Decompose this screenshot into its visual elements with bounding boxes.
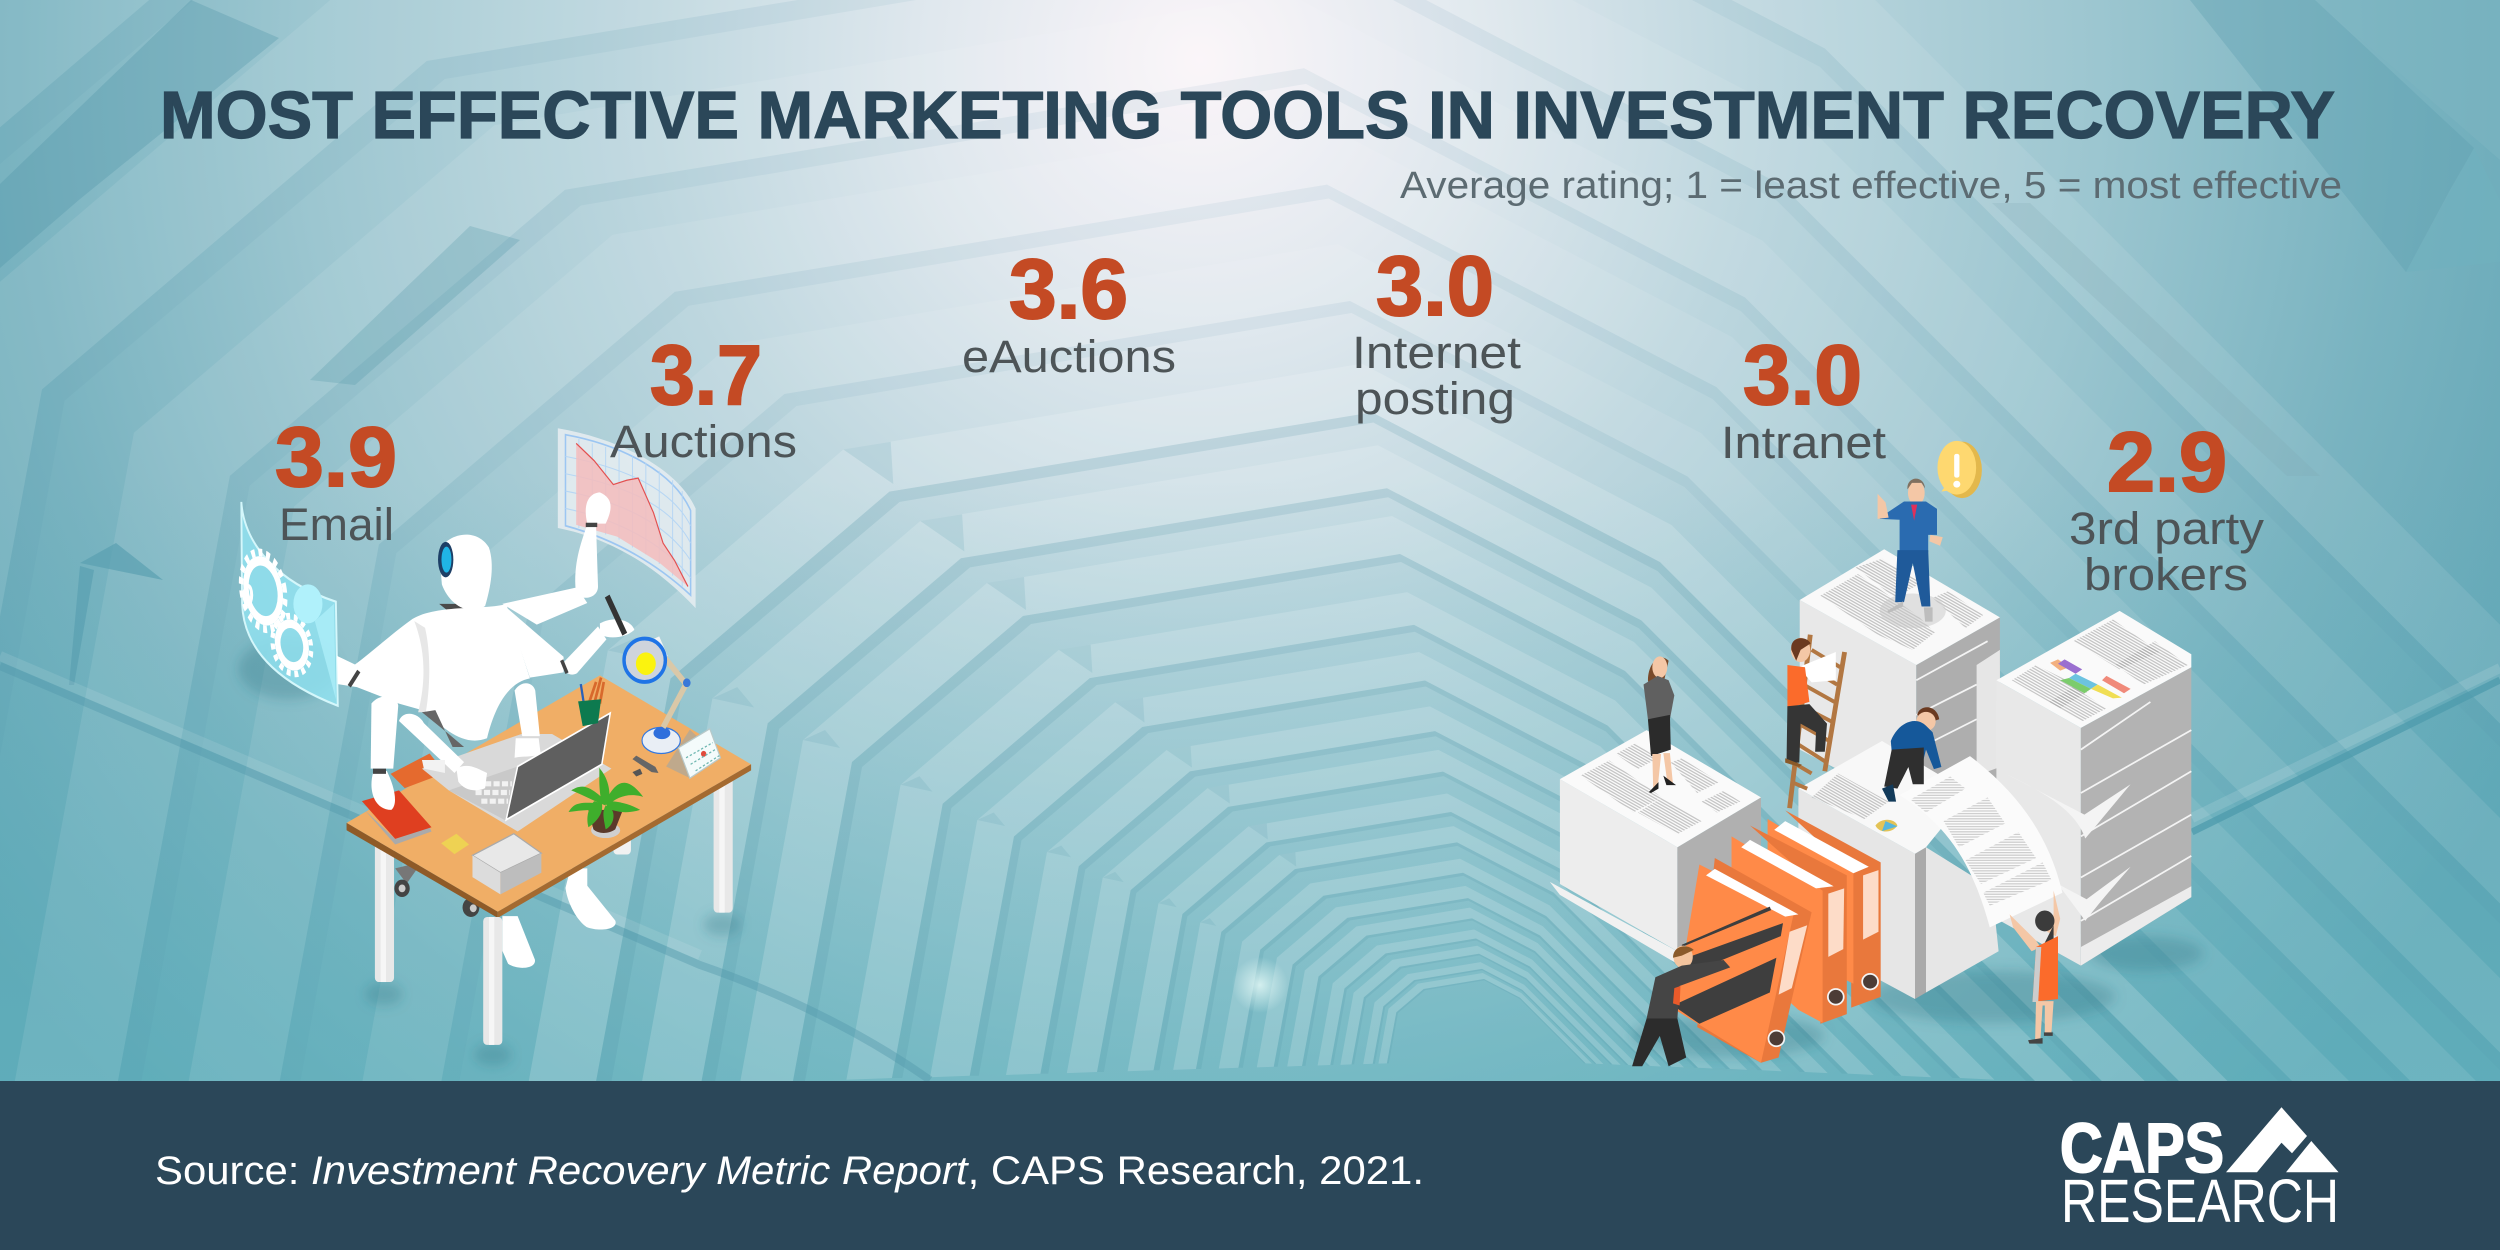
person: woman holding paper (2010, 891, 2060, 1044)
icon: pencil cup (578, 678, 604, 726)
icon: alert speech bubble (1937, 441, 1982, 498)
score: auctions (610, 328, 797, 467)
robot upper right arm and hand (502, 492, 611, 625)
person: man bending over paper (1882, 707, 1941, 802)
score: eAuctions (962, 242, 1176, 382)
hologram panel: gears (235, 502, 338, 706)
robot inner right arm and hand (515, 683, 541, 758)
robot pen hand (506, 596, 634, 678)
desk (347, 675, 751, 1045)
icon: paper box (472, 834, 541, 894)
curved sheet (1900, 756, 2062, 927)
subtitle: rating scale: Average rating; 1 = least effective, 5 = most effective (1400, 165, 2342, 207)
robot (337, 492, 634, 810)
hologram panel: falling chart (558, 428, 696, 608)
binder: front tilted (1673, 858, 1812, 1063)
robot left arm (337, 619, 432, 712)
robot lower left arm and hand (371, 696, 398, 810)
icon: desk calendar (666, 729, 720, 778)
score: email: Email (279, 499, 394, 550)
illustration: paper stacks, binders and workers (1550, 441, 2203, 1066)
score: email (275, 410, 397, 550)
score: internet posting (1352, 239, 1522, 424)
paper stack: left with woman (1550, 730, 1761, 966)
paper corner fold (2005, 773, 2131, 839)
robot inner left arm and hand (399, 710, 487, 790)
ladder (1790, 635, 1845, 808)
binder: middle (1732, 826, 1847, 1024)
laptop (422, 713, 611, 832)
score: 3rd party brokers: 3rd party (2069, 503, 2265, 554)
logo: CAPS Research (2060, 1107, 2339, 1235)
score: 3rd party brokers: brokers (2084, 549, 2248, 600)
colored table on paper (2050, 659, 2131, 698)
icon: sticky note (441, 834, 469, 854)
paper stack: top center (1800, 549, 2000, 810)
logo: CAPS Research: CAPS (2060, 1109, 2224, 1187)
score: auctions: Auctions (610, 416, 797, 467)
score: eAuctions: eAuctions (962, 331, 1176, 382)
robot torso (412, 604, 530, 741)
icon: lamp (624, 636, 691, 753)
score: internet posting: Internet (1352, 327, 1522, 378)
icon: marker and clips (632, 756, 658, 776)
robot head and neck (438, 535, 492, 615)
score: intranet: 3.0 (1743, 328, 1862, 422)
score: intranet: Intranet (1721, 417, 1887, 468)
score: 3rd party brokers (2069, 415, 2265, 600)
score: auctions: 3.7 (650, 328, 762, 422)
icon: red notebook (362, 790, 432, 845)
person: man in blue suit (1878, 479, 1946, 628)
binder: rear (1768, 810, 1881, 1008)
footer bar (0, 1081, 2500, 1250)
person: man climbing ladder (1785, 638, 1836, 767)
logo: CAPS Research: RESEARCH (2061, 1167, 2339, 1235)
person: man pushing binder (1632, 946, 1730, 1066)
score: email: 3.9 (275, 410, 397, 504)
source text: Source: Investment Recovery Metric Report , CAPS Research, 2021. (155, 1149, 1424, 1193)
icon: potted plant (569, 768, 643, 838)
robot shadows (238, 639, 742, 1066)
desk items (362, 636, 720, 894)
ground shadows (1631, 936, 2203, 1058)
score: eAuctions: 3.6 (1009, 242, 1128, 336)
score: internet posting: 3.0 (1376, 239, 1494, 333)
score: 3rd party brokers: 2.9 (2107, 415, 2227, 509)
paper stack: right (1996, 611, 2191, 966)
paper stack: front center (1798, 741, 2062, 999)
title: MOST EFFECTIVE MARKETING TOOLS IN INVESTMENT RECOVERY (160, 78, 2335, 153)
desk legs and robot feet (375, 777, 733, 982)
person: woman with crossed arms (1644, 656, 1676, 793)
score: internet posting: posting (1355, 373, 1515, 424)
score: intranet (1721, 328, 1887, 468)
illustration: robot at desk (235, 428, 751, 1066)
